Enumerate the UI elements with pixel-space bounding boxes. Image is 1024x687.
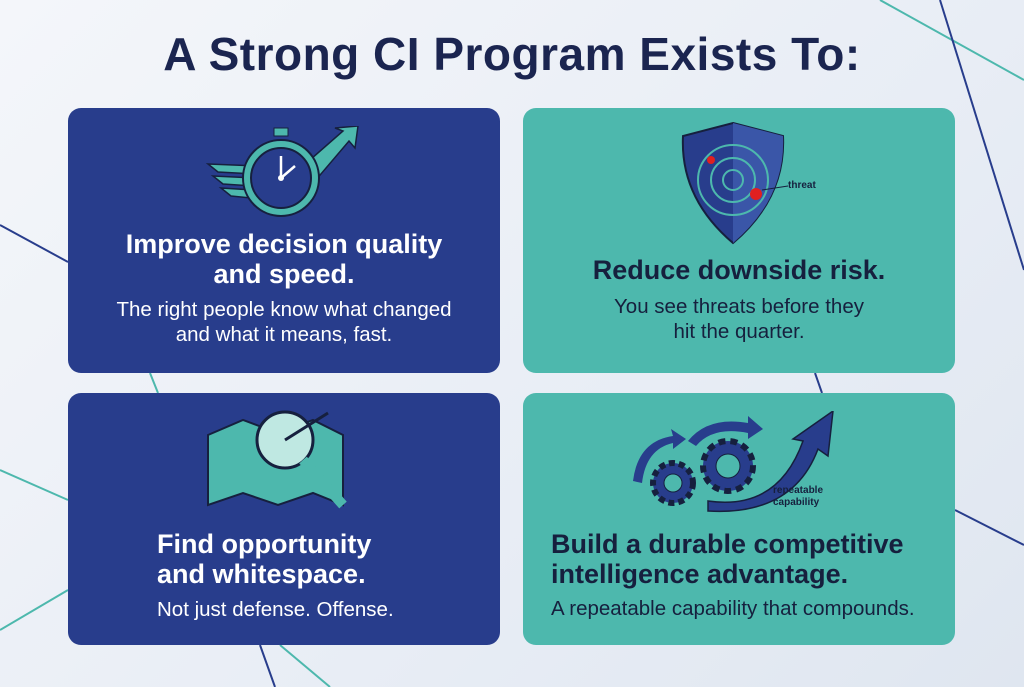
panel: opportunity [68, 393, 500, 645]
icon: gears and arrow: capability [773, 497, 820, 508]
body text: Not just defense. Offense. [157, 598, 394, 621]
body text: A repeatable capability that compounds. [551, 597, 915, 620]
heading [551, 529, 904, 589]
heading: intelligence advantage. [551, 559, 848, 589]
body text: hit the quarter. [673, 320, 805, 343]
heading: and speed. [213, 259, 355, 289]
heading: Find opportunity [157, 529, 371, 559]
heading: and whitespace. [157, 559, 366, 589]
heading: Reduce downside risk. [593, 255, 885, 285]
body text: The right people know what changed [116, 298, 452, 321]
icon: gears and arrow: repeatable [773, 485, 823, 496]
heading: Improve decision quality [126, 229, 442, 259]
panel: decision quality [68, 108, 500, 373]
heading: Build a durable competitive [551, 529, 904, 559]
body text [116, 298, 452, 346]
icon: map with magnifier [207, 410, 347, 508]
icon: radar shield: threat [788, 180, 816, 191]
heading [126, 229, 442, 289]
body text: You see threats before they [614, 295, 864, 318]
icon: stopwatch with arrow [206, 126, 359, 217]
icon: gears and arrow [633, 411, 834, 512]
panel: durable advantage [523, 393, 955, 645]
panel: downside risk [523, 108, 955, 373]
icon: radar shield [682, 122, 816, 244]
body text: and what it means, fast. [176, 323, 392, 346]
heading [157, 529, 372, 589]
title: A Strong CI Program Exists To: [163, 28, 861, 80]
body text [614, 295, 864, 343]
